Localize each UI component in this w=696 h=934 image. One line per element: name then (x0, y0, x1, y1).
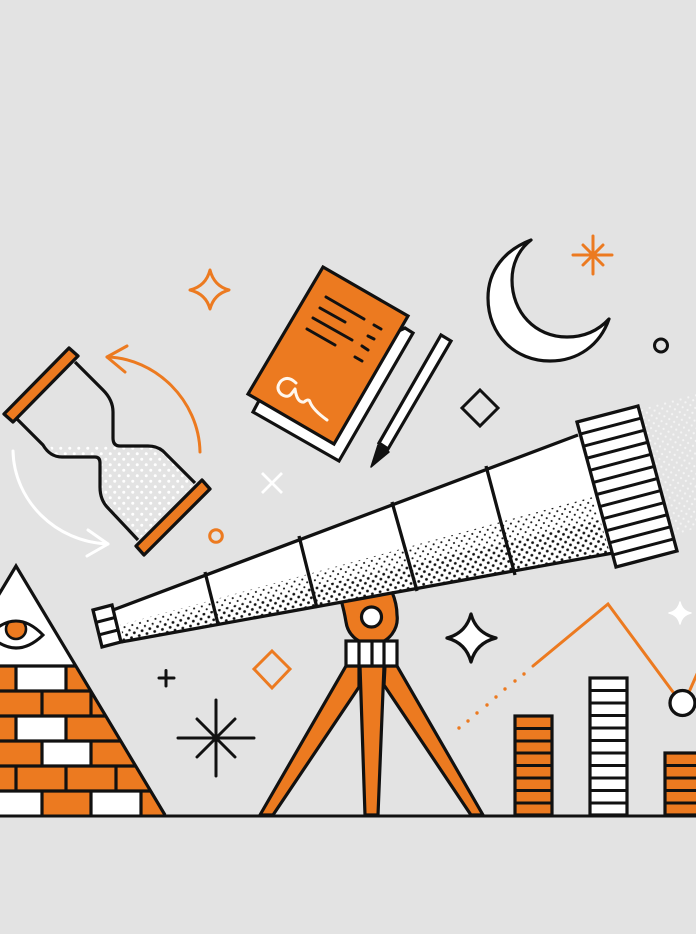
mount pivot (362, 607, 382, 627)
halftone shading (120, 497, 610, 642)
white bar (589, 678, 628, 815)
light beam dots (640, 392, 696, 535)
document book (248, 267, 413, 461)
orange trend line (533, 604, 696, 692)
left leg (260, 666, 359, 815)
mount (341, 592, 397, 644)
black plus (159, 670, 174, 686)
tube outline (113, 435, 613, 642)
illustration (0, 234, 696, 818)
signature (278, 378, 327, 420)
orange sparkle (190, 270, 229, 309)
black eight point star (178, 700, 254, 776)
telescope (93, 406, 677, 647)
orange small circle (210, 530, 222, 542)
centre leg (360, 666, 384, 815)
collar (346, 641, 397, 666)
orange asterisk star (573, 236, 612, 274)
white rotation arrow (13, 451, 108, 556)
black small circle (654, 339, 668, 352)
hourglass bottom bar (136, 480, 210, 555)
orange cover (248, 267, 408, 444)
back page (253, 328, 413, 461)
brick wall (0, 664, 163, 814)
ground line (0, 814, 696, 818)
trend marker circle (670, 690, 695, 716)
text lines (307, 297, 381, 361)
objective lens ring (577, 406, 677, 567)
pencil (371, 335, 451, 467)
black diamond (462, 390, 498, 426)
pyramid outline (0, 566, 165, 815)
pyramid (0, 563, 166, 814)
white sparkle (669, 602, 691, 624)
orange diamond (254, 651, 290, 688)
telescope tube (113, 435, 613, 642)
pyramid body (0, 566, 165, 815)
orange bar left (514, 716, 553, 815)
dotted trend line (457, 672, 526, 730)
right leg (384, 666, 483, 815)
eyepiece (93, 605, 121, 647)
hourglass top bar (4, 348, 78, 422)
tripod (260, 592, 483, 815)
hourglass (4, 348, 210, 555)
orange rotation arrow (107, 346, 200, 452)
orange bar right (664, 753, 696, 815)
tube joints (205, 466, 515, 624)
black sparkle (447, 614, 496, 662)
hourglass outline (17, 362, 195, 540)
white cross (262, 473, 282, 493)
eye (0, 619, 43, 648)
moon (488, 240, 609, 361)
hourglass sand (50, 446, 195, 540)
